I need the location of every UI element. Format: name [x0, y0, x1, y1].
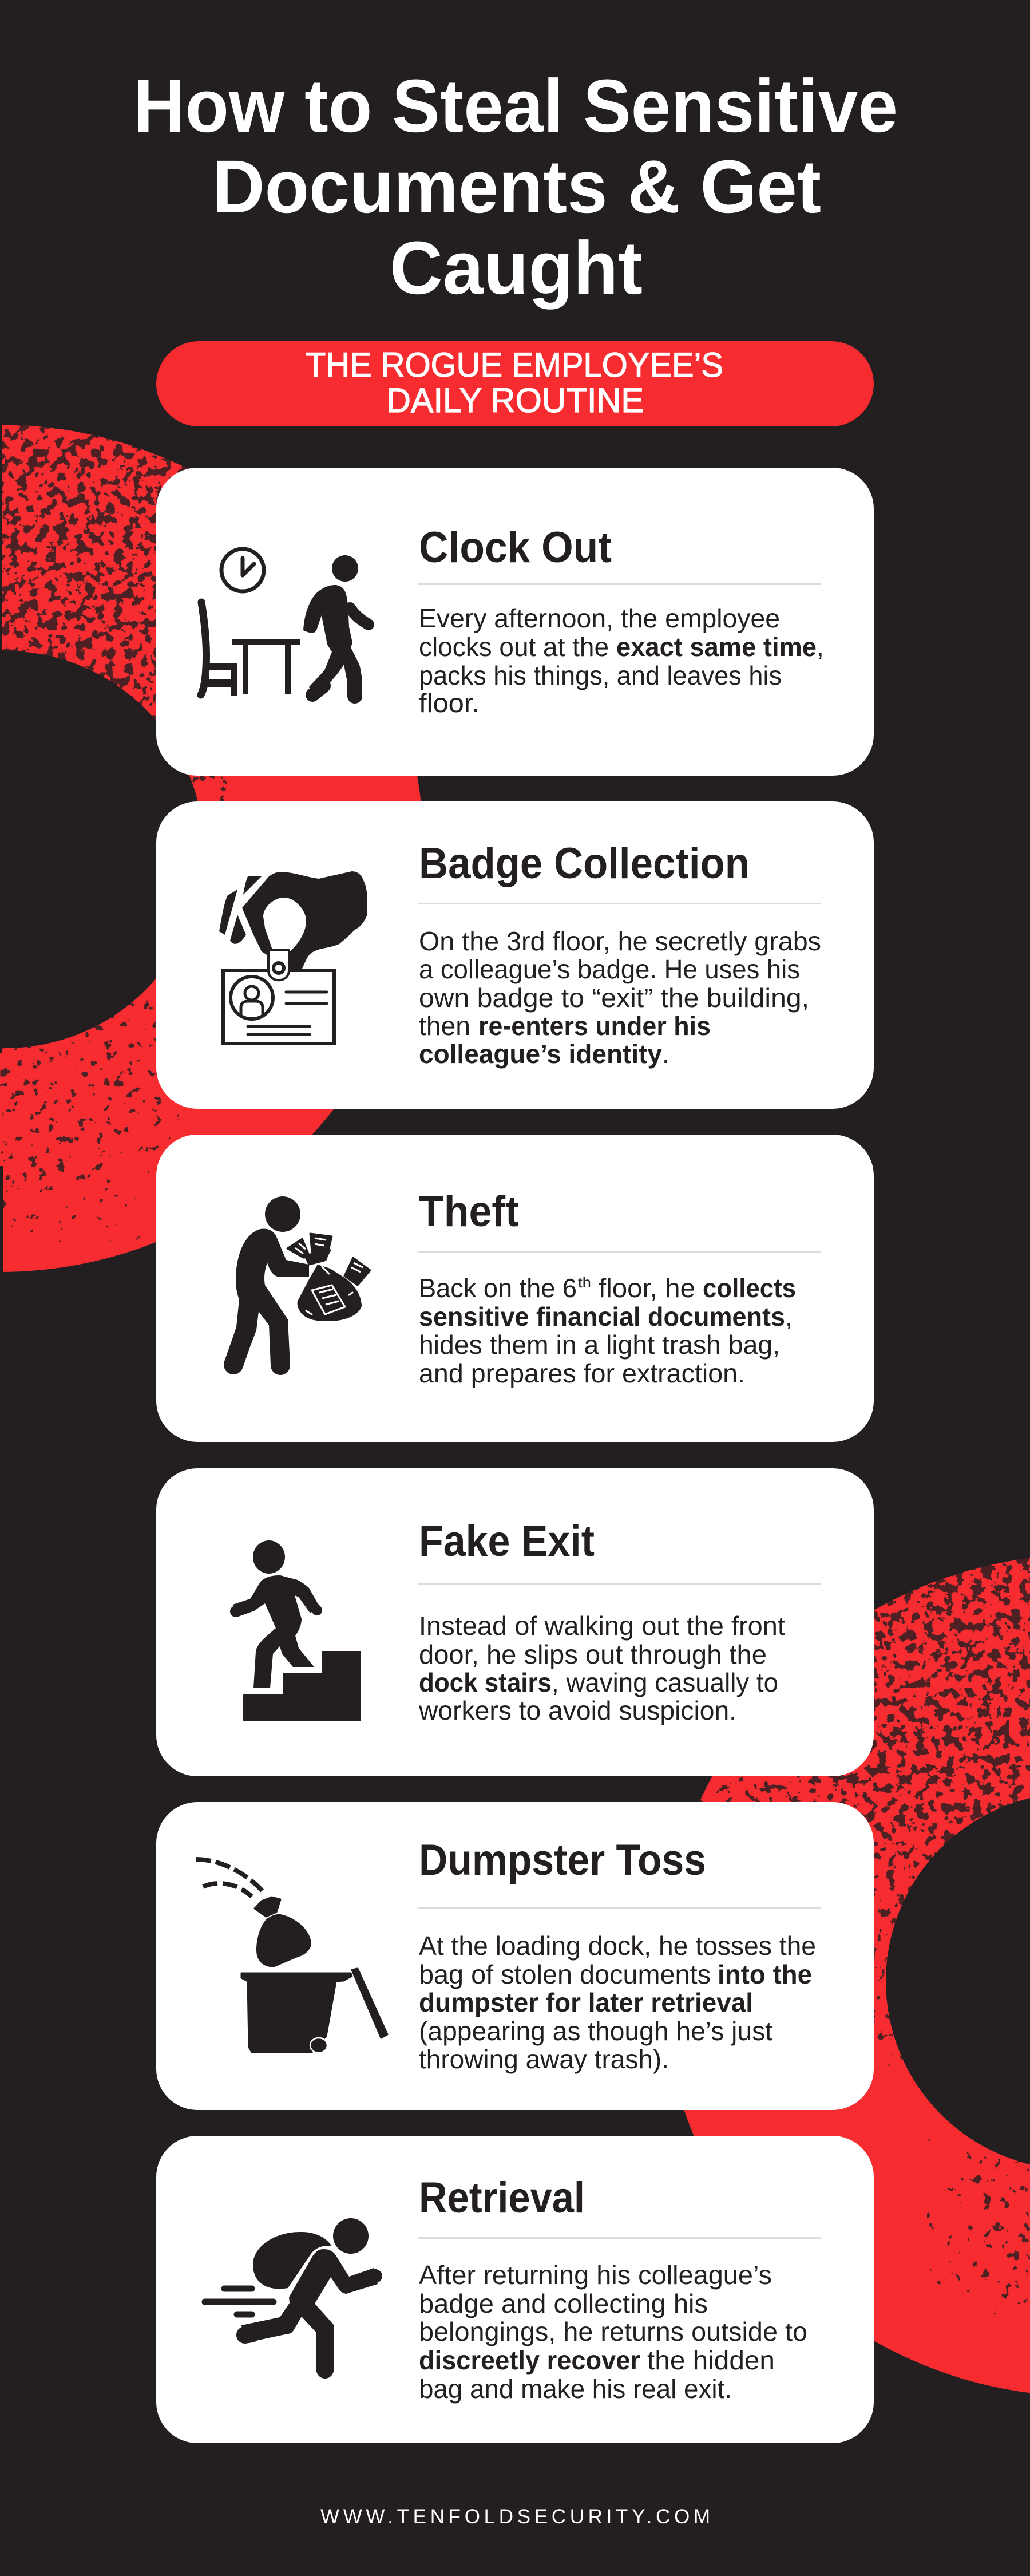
body text: Instead of walking out the front: [419, 1611, 785, 1641]
body text: discreetly recover: [419, 2345, 640, 2375]
body text: exact same time: [616, 632, 817, 662]
body text: belongings, he returns outside to: [419, 2317, 807, 2346]
panel: dumpster toss: [156, 1802, 874, 2110]
body text: .: [662, 1039, 670, 1069]
body text: [419, 2260, 807, 2404]
heading: Badge Collection: [419, 839, 750, 888]
body text: [419, 1931, 816, 2074]
body text: [419, 603, 824, 718]
subtitle pill: THE ROGUE EMPLOYEE’S: [306, 346, 723, 384]
body text: workers to avoid suspicion.: [418, 1696, 736, 1725]
body text: ,: [785, 1302, 793, 1332]
icon: man stuffing documents into a bag: [224, 1196, 370, 1369]
icon: man climbing stairs: [233, 1540, 361, 1721]
body text: hides them in a light trash bag,: [419, 1330, 780, 1360]
title: Caught: [390, 226, 643, 310]
icon: clock, desk and walking man: [201, 549, 369, 696]
body text: On the 3rd floor, he secretly grabs: [419, 926, 821, 956]
body text: a colleague’s badge. He uses his: [419, 954, 800, 984]
icon: hand taking a badge: [219, 871, 367, 1044]
icon: man running with a sack: [205, 2218, 378, 2372]
panel: badge collection: [156, 801, 874, 1109]
background ring: right speckled red arc: [658, 1551, 1030, 2396]
body text: the hidden: [647, 2345, 775, 2375]
panel: theft: [156, 1135, 874, 1442]
body text: Every afternoon, the employee: [419, 603, 780, 633]
panel: retrieval: [156, 2136, 874, 2443]
body text: , waving casually to: [552, 1668, 778, 1697]
body text: sensitive financial documents: [419, 1302, 785, 1332]
footer url: WWW.TENFOLDSECURITY.COM: [320, 2506, 710, 2528]
body text: floor.: [419, 688, 480, 718]
body text: clocks out at the: [419, 632, 609, 662]
heading: Dumpster Toss: [419, 1836, 706, 1884]
body text: floor, he: [599, 1273, 695, 1303]
body text: [418, 1611, 785, 1725]
heading: Retrieval: [419, 2174, 585, 2222]
body text: bag and make his real exit.: [419, 2374, 732, 2404]
subtitle pill: [156, 341, 874, 426]
body text: then: [419, 1011, 470, 1041]
panel: clock out: [156, 468, 874, 776]
title: How to Steal Sensitive: [133, 64, 898, 148]
body text: bag of stolen documents: [419, 1959, 711, 1989]
background ring: left speckled red arc: [0, 424, 423, 1275]
body text: door, he slips out through the: [419, 1639, 767, 1669]
body text: dumpster for later retrieval: [419, 1988, 753, 2017]
body text: th: [578, 1274, 591, 1291]
body text: and prepares for extraction.: [419, 1358, 745, 1388]
body text: colleague’s identity: [419, 1039, 662, 1069]
body text: (appearing as though he’s just: [419, 2016, 772, 2046]
subtitle pill: DAILY ROUTINE: [386, 381, 644, 420]
body text: own badge to “exit” the building,: [419, 983, 809, 1013]
body text: Back on the 6: [419, 1273, 577, 1303]
body text: badge and collecting his: [419, 2289, 708, 2318]
heading: Theft: [419, 1187, 519, 1236]
title: Documents & Get: [212, 144, 821, 228]
body text: At the loading dock, he tosses the: [419, 1931, 816, 1961]
body text: dock stairs: [419, 1668, 552, 1697]
body text: throwing away trash).: [419, 2044, 669, 2074]
title: [133, 64, 898, 310]
body text: After returning his colleague’s: [419, 2260, 772, 2290]
body text: into the: [718, 1959, 812, 1989]
panel: fake exit: [156, 1468, 874, 1776]
heading: Clock Out: [419, 523, 612, 572]
body text: ,: [817, 632, 824, 662]
body text: collects: [703, 1273, 796, 1303]
body text: [419, 1273, 796, 1388]
body text: packs his things, and leaves his: [419, 661, 782, 690]
heading: Fake Exit: [419, 1517, 595, 1566]
icon: bag tossed into a dumpster: [196, 1859, 387, 2053]
body text: re-enters under his: [478, 1011, 711, 1041]
body text: [419, 926, 821, 1069]
